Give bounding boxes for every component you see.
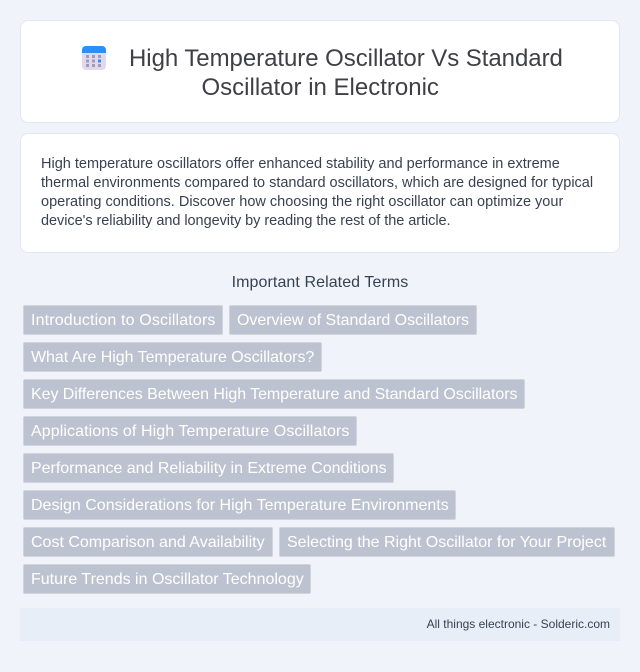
intro text: device's reliability and longevity by reading the rest of the article. — [41, 213, 451, 229]
tag — [23, 416, 357, 446]
intro text — [41, 156, 593, 229]
tag — [23, 379, 525, 409]
tag: Applications of High Temperature Oscillators — [31, 423, 349, 440]
tag — [23, 564, 311, 594]
tag: Future Trends in Oscillator Technology — [31, 571, 304, 588]
tag: Cost Comparison and Availability — [31, 534, 265, 551]
panel: title card — [20, 20, 620, 123]
panel: intro card — [20, 133, 620, 253]
intro text: thermal environments compared to standard oscillators, which are designed for typical — [41, 175, 593, 191]
tag: Introduction to Oscillators — [31, 312, 216, 329]
title: Oscillator in Electronic — [202, 74, 439, 101]
title: High Temperature Oscillator Vs Standard — [129, 45, 563, 72]
intro text: High temperature oscillators offer enhanced stability and performance in extreme — [41, 156, 560, 172]
heading: related terms: Important Related Terms — [232, 274, 408, 291]
tag — [279, 527, 615, 557]
tag — [23, 527, 273, 557]
tag: What Are High Temperature Oscillators? — [31, 349, 314, 366]
footer: All things electronic - Solderic.com — [427, 617, 610, 631]
tag — [23, 453, 394, 483]
tag — [23, 305, 223, 335]
title — [129, 45, 563, 101]
intro text: operating conditions. Discover how choosing the right oscillator can optimize your — [41, 194, 563, 210]
tag: Selecting the Right Oscillator for Your Project — [287, 534, 606, 551]
tag: Performance and Reliability in Extreme Conditions — [31, 460, 387, 477]
tag — [229, 305, 477, 335]
tag — [23, 342, 322, 372]
tag: Design Considerations for High Temperature Environments — [31, 497, 449, 514]
tag — [23, 490, 456, 520]
tag: Overview of Standard Oscillators — [237, 312, 469, 329]
icon: calendar grid — [82, 46, 106, 70]
footer — [20, 608, 620, 641]
tag: Key Differences Between High Temperature and Standard Oscillators — [31, 386, 517, 403]
